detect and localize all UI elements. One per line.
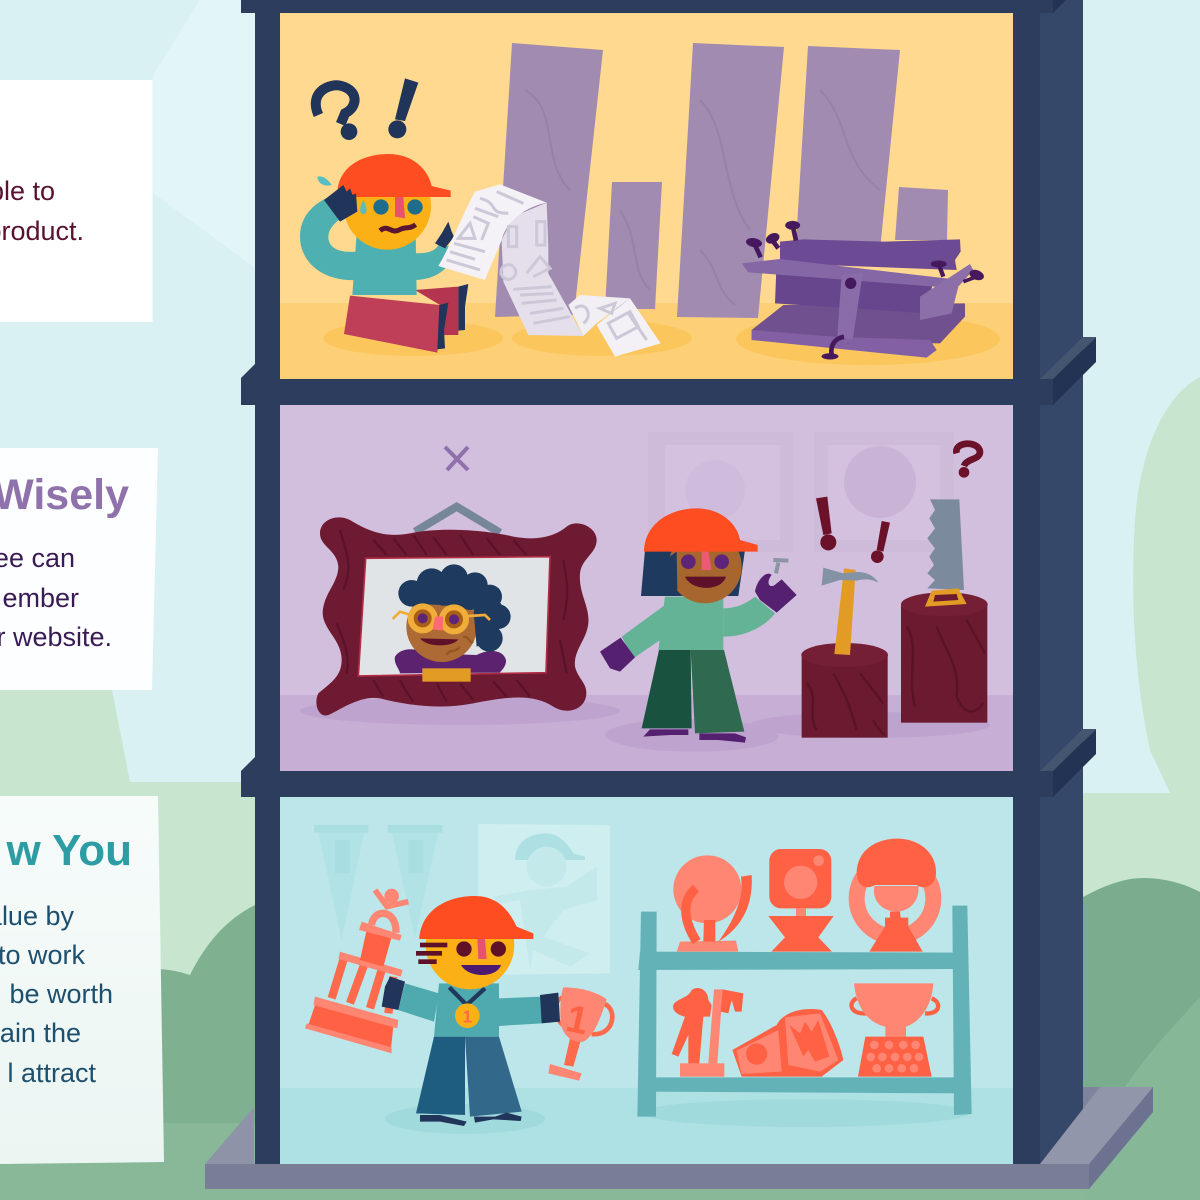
card 3 body text: to work (0, 940, 85, 970)
red exclamation and question marks (816, 444, 980, 563)
ring trophy (857, 839, 936, 952)
ghost wall frames (648, 432, 954, 552)
exclamation mark (388, 78, 418, 138)
figure trophy (672, 988, 743, 1077)
card 2: text panel (0, 448, 158, 690)
purple x mark (445, 447, 468, 470)
trophy cup with number one: 1 (562, 997, 592, 1043)
trousers (642, 650, 746, 743)
room 1: yellow confusion room (280, 13, 1013, 379)
broken purple wood pile (742, 221, 985, 359)
trophy shelf (637, 839, 972, 1117)
question mark (316, 85, 357, 140)
card 2 body text (0, 543, 112, 652)
portrait person (393, 564, 511, 682)
proud worker with trophies (305, 889, 612, 1126)
legs (344, 284, 468, 353)
bent nails (745, 221, 985, 359)
card 3 body text: l attract (7, 1058, 96, 1088)
building structure (241, 0, 1153, 1164)
medal (455, 1003, 480, 1028)
card 3 body text (0, 901, 113, 1088)
hanging portrait frame (316, 507, 597, 715)
card 3 heading: w You (6, 826, 132, 875)
shelf frame (637, 906, 972, 1117)
room 2: purple misuse room (280, 405, 1013, 771)
ghost pennants and poster (314, 824, 610, 975)
worker holding a nail (600, 508, 797, 752)
unrolling paper scroll (438, 184, 661, 357)
stump with saw (901, 499, 988, 723)
card 1: text panel (0, 80, 152, 322)
room 3: teal achievements room (280, 797, 1013, 1164)
torso and arms (300, 197, 450, 295)
tall tilted trophy (305, 889, 408, 1053)
square badge trophy (768, 849, 834, 952)
medal: 1 (463, 1007, 473, 1027)
card 3 body text: ain the (0, 1018, 81, 1048)
torso and sleeves (398, 983, 542, 1037)
standing purple boards (495, 43, 948, 318)
globe trophy (673, 855, 752, 952)
cup on dotted base (851, 983, 938, 1077)
gloves (600, 574, 797, 672)
card 3 body text: be worth (9, 979, 113, 1009)
worried worker with question marks (300, 78, 468, 353)
trousers (416, 1037, 522, 1126)
trophy cup with number one (548, 987, 612, 1081)
championship belt (732, 1009, 843, 1077)
arms (622, 597, 775, 658)
card 3: text panel (0, 796, 164, 1164)
head (416, 896, 533, 989)
gloves (382, 977, 560, 1023)
card 1 body text (0, 176, 84, 246)
card 2 body text: ember (2, 583, 79, 613)
foundation slab back (205, 1087, 1153, 1189)
floor shadows (323, 313, 1000, 365)
stump with hammer (801, 568, 888, 738)
